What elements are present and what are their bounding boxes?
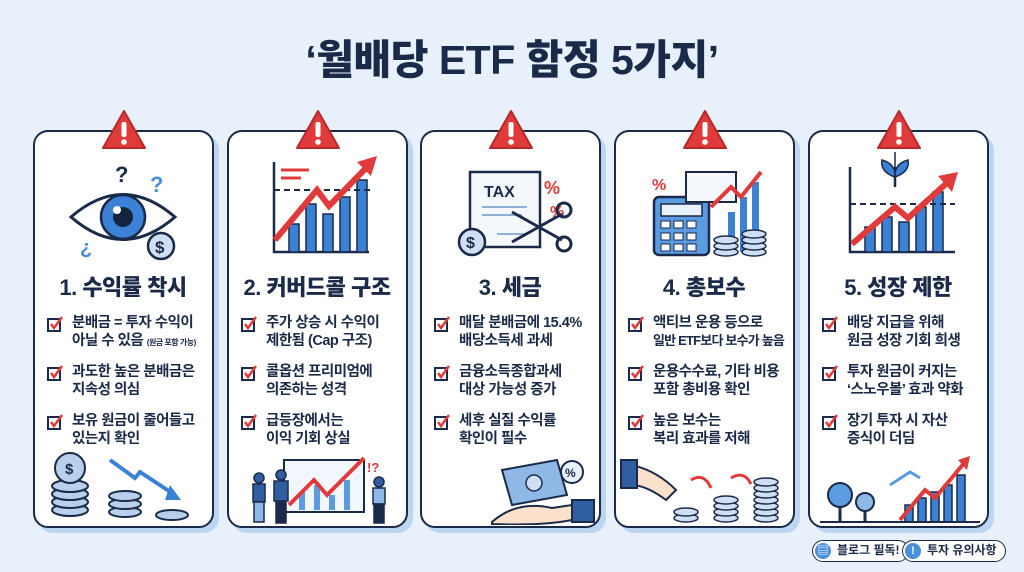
- panel: 4 총보수: [614, 130, 795, 528]
- bullets: ‘스노우볼’ 효과 약화: [847, 382, 963, 398]
- bullets: 분배금 = 투자 수익이: [72, 315, 193, 331]
- icon: tax document: %: [550, 204, 564, 221]
- bullets: 배당소득세 과세: [459, 333, 552, 349]
- illustration: hand taking coins: [620, 459, 779, 523]
- icon: calculator and fees: [652, 170, 767, 257]
- bullets: 운용수수료, 기타 비용: [653, 364, 779, 380]
- icon: eye: ?: [115, 162, 128, 187]
- bullets: 급등장에서는: [266, 413, 343, 429]
- bullets: [822, 314, 964, 447]
- icon: eye: [68, 162, 178, 260]
- tag: blog: 블로그 필독!: [837, 543, 900, 557]
- chart: capped growth: [272, 156, 377, 254]
- heading: 1. 수익률 착시: [59, 275, 187, 300]
- icon: tax document: [458, 170, 572, 256]
- bullets: 이익 기회 상실: [266, 431, 350, 447]
- bullets: 콜옵션 프리미엄에: [266, 364, 372, 380]
- bullets: 세후 실질 수익률: [459, 413, 556, 429]
- icon: eye: ?: [150, 172, 163, 197]
- bullets: [241, 314, 379, 447]
- bullets: 투자 원금이 커지는: [847, 364, 957, 380]
- illustration: hand with money: %: [565, 466, 576, 480]
- illustration: people at board: !?: [367, 460, 379, 475]
- bullets: 대상 가능성 증가: [459, 382, 556, 398]
- icon: eye: ¿: [80, 237, 92, 259]
- icon: warning: [296, 110, 340, 149]
- icon: eye: $: [155, 238, 165, 257]
- bullets: 장기 투자 시 자산: [847, 413, 947, 429]
- bullets: 높은 보수는: [653, 413, 721, 429]
- bullets: 원금 성장 기회 희생: [847, 333, 960, 349]
- icon: tax document: $: [466, 235, 475, 252]
- bullets: [628, 314, 784, 447]
- icon: warning: [877, 110, 921, 149]
- bullets: 금융소득종합과세: [459, 364, 562, 380]
- bullets: 확인이 필수: [459, 431, 527, 447]
- icon: warning: [102, 110, 146, 149]
- bullets: 있는지 확인: [72, 431, 140, 447]
- chart: limited growth with plant: [848, 152, 958, 254]
- panel: 5 성장 제한: [808, 130, 989, 528]
- tag: blog: [812, 540, 909, 562]
- illustration: trees and growth: [820, 456, 980, 523]
- icon: calculator and fees: %: [652, 177, 666, 194]
- heading: 4. 총보수: [663, 275, 745, 300]
- bullets: 제한됨 (Cap 구조): [266, 333, 372, 349]
- bullets: 일반 ETF보다 보수가 높음: [653, 333, 784, 348]
- illustration: shrinking coins: [51, 452, 189, 521]
- bullets: 액티브 운용 등으로: [653, 315, 763, 331]
- bullets: 과도한 높은 분배금은: [72, 364, 195, 380]
- bullets: 매달 분배금에 15.4%: [459, 315, 582, 331]
- bullets: 지속성 의심: [72, 382, 140, 398]
- icon: warning: [489, 110, 533, 149]
- bullets: 복리 효과를 저해: [653, 431, 750, 447]
- bullets: 배당 지급을 위해: [847, 315, 944, 331]
- panel: 2 커버드콜 구조: [227, 130, 408, 528]
- heading: 2. 커버드콜 구조: [243, 275, 390, 300]
- tag: caution: !: [911, 545, 915, 557]
- bullets: 증식이 더딤: [847, 431, 915, 447]
- illustration: shrinking coins: $: [65, 461, 74, 478]
- bullets: 아닐 수 있음 (원금 포함 가능): [72, 333, 196, 349]
- icon: warning: [683, 110, 727, 149]
- bullets: 포함 총비용 확인: [653, 382, 750, 398]
- icon: tax document: TAX: [484, 184, 515, 201]
- title: ‘월배당 ETF 함정 5가지’: [305, 37, 719, 83]
- heading: 5. 성장 제한: [844, 275, 952, 300]
- bullets: [47, 314, 196, 447]
- bullets: 보유 원금이 줄어들고: [72, 413, 195, 429]
- bullets: 주가 상승 시 수익이: [266, 315, 379, 331]
- tag: caution: 투자 유의사항: [927, 543, 997, 557]
- panel: 3 세금: [420, 130, 601, 528]
- bullets: 의존하는 성격: [266, 382, 347, 398]
- bullets: [434, 314, 582, 447]
- heading: 3. 세금: [479, 275, 541, 300]
- illustration: people at board: [252, 456, 386, 524]
- tag: caution: [902, 540, 1006, 562]
- panel: 1 수익률 착시: [33, 130, 214, 528]
- tag: blog: ▤: [818, 545, 828, 557]
- illustration: hand with money: [491, 458, 595, 525]
- icon: tax document: %: [544, 178, 560, 198]
